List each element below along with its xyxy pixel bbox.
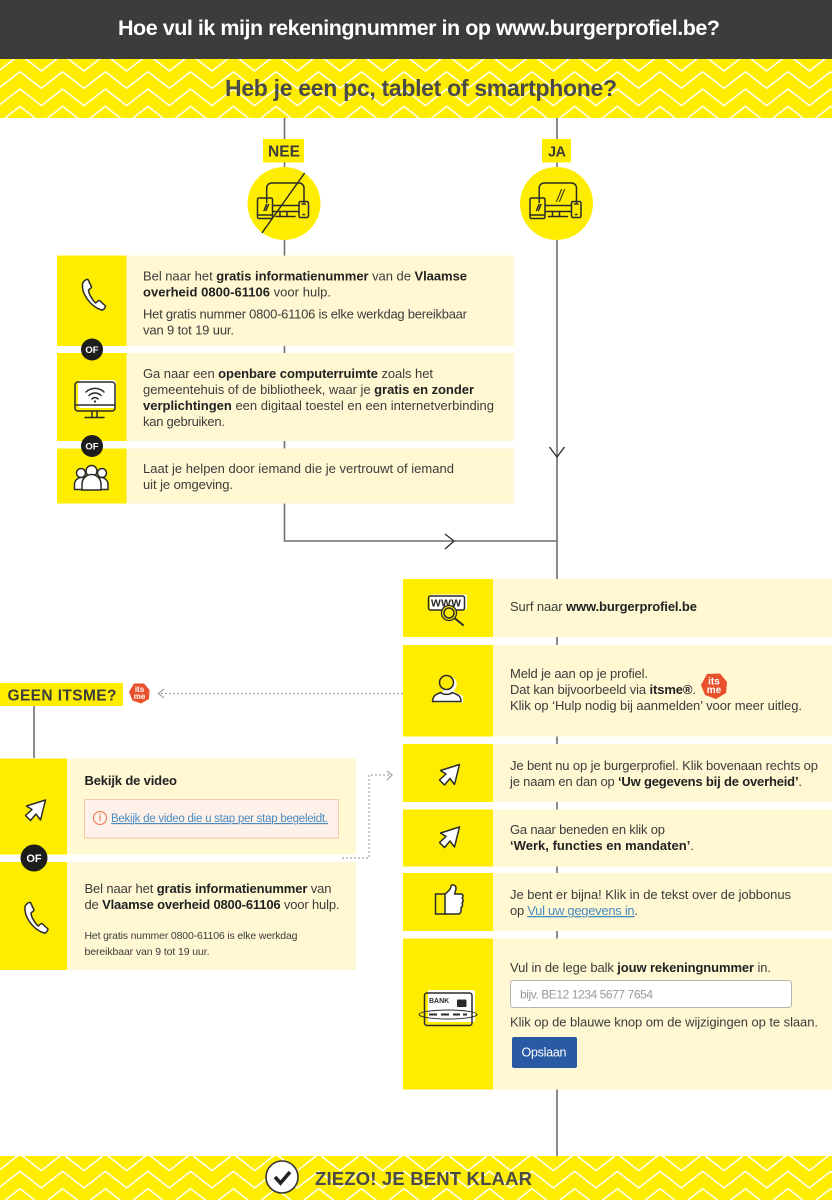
panel: public computer room: kan gebruiken. [143, 414, 225, 429]
panel: call the information number: van 9 tot 19 uur. [143, 322, 234, 338]
panel: ask someone you trust: uit je omgeving. [143, 477, 233, 492]
label: NEE [263, 139, 304, 162]
question band [0, 59, 832, 118]
badge: OF [81, 338, 103, 360]
icon: www search [428, 594, 467, 625]
label: JA: JA [548, 144, 567, 160]
input field [510, 980, 792, 1008]
icon: devices [520, 167, 593, 240]
panel: log in [403, 645, 832, 736]
logo: itsme [701, 674, 727, 699]
panel: your name and government data [403, 744, 832, 802]
panel: enter account number: Vul in de lege balk jouw rekeningnummer in. [510, 960, 771, 975]
badge: OF: OF [85, 345, 99, 356]
label: JA [542, 139, 571, 162]
arrow: JA line downward [550, 447, 564, 457]
panel: public computer room: verplichtingen een digitaal toestel en een internetverbinding [143, 398, 494, 413]
panel: public computer room: gemeentehuis of de bibliotheek, waar je gratis en zonder [143, 382, 474, 397]
panel: almost done: op Vul uw gegevens in. [510, 903, 638, 918]
arrow: NEE line joins to the right [445, 534, 454, 549]
icon: person [432, 676, 463, 702]
icon: cursor [26, 800, 46, 820]
icon: bank card [419, 990, 477, 1026]
label: NEE: NEE [268, 144, 300, 160]
icon: check mark [266, 1161, 298, 1193]
panel: call the information number: de Vlaamse overheid 0800-61106 voor hulp. [84, 897, 340, 912]
icon: telephone [82, 279, 106, 310]
icon: bank card: BANK [429, 998, 449, 1005]
panel: call the information number [0, 862, 356, 970]
badge: OF [81, 435, 103, 457]
logo: itsme: me [707, 685, 722, 696]
alert box: Bekijk de video die u stap per stap begeleidt. [111, 813, 328, 825]
question band: Heb je een pc, tablet of smartphone? [225, 75, 617, 101]
panel: call the information number: Het gratis nummer 0800-61106 is elke werkdag [84, 930, 298, 942]
panel: call the information number: Het gratis nummer 0800-61106 is elke werkdag bereikbaar [143, 306, 468, 322]
panel: call the information number: overheid 0800-61106 voor hulp. [143, 284, 331, 300]
dotted arrow to GEEN ITSME [158, 689, 403, 698]
tag: GEEN ITSME? [0, 683, 123, 706]
icon: cursor [440, 827, 460, 848]
panel: ask someone you trust [57, 448, 514, 504]
panel: almost done: Je bent er bijna! Klik in de tekst over de jobbonus [510, 887, 792, 902]
panel: surf to website [403, 579, 832, 637]
icon: cursor [440, 764, 460, 785]
dotted arrow back to main flow [342, 771, 392, 858]
panel: public computer room [57, 353, 514, 441]
icon: thumbs up [436, 885, 463, 914]
tag: GEEN ITSME?: GEEN ITSME? [8, 688, 116, 704]
badge: OF [20, 844, 48, 872]
panel: call the information number: bereikbaar van 9 tot 19 uur. [84, 946, 210, 958]
logo: itsme [129, 684, 150, 704]
panel: enter account number: Klik op de blauwe knop om de wijzigingen op te slaan. [510, 1014, 818, 1030]
flow line: JA branch [556, 118, 558, 1157]
icon: devices crossed out [248, 167, 320, 240]
panel: almost done [403, 873, 832, 931]
panel: work, functions and mandates: ‘Werk, functies en mandaten’. [510, 838, 694, 853]
panel: enter account number [403, 938, 832, 1090]
panel: your name and government data: je naam en dan op ‘Uw gegevens bij de overheid’. [509, 774, 802, 789]
button: Opslaan: Opslaan [522, 1046, 567, 1060]
panel: watch the video: Bekijk de video [84, 773, 177, 788]
input field: bijv. BE12 1234 5677 7654 [520, 988, 653, 1002]
icon: computer with wifi [75, 380, 116, 418]
panel: call the information number: Bel naar het gratis informatienummer van [84, 881, 332, 896]
panel: log in: Meld je aan op je profiel. [510, 666, 648, 681]
logo: itsme: me [134, 692, 146, 701]
logo: itsme: its [135, 685, 145, 694]
badge: OF: OF [85, 442, 99, 452]
badge: OF: OF [26, 853, 42, 865]
flow line: NEE branch [284, 118, 557, 541]
button: Opslaan [512, 1037, 577, 1068]
logo: itsme: its [708, 676, 720, 688]
title bar: Hoe vul ik mijn rekeningnummer in op www.burgerprofiel.be? [118, 16, 720, 40]
panel: surf to website: Surf naar www.burgerprofiel.be [510, 599, 697, 614]
title bar [0, 0, 832, 59]
panel: ask someone you trust: Laat je helpen door iemand die je vertrouwt of iemand [143, 461, 454, 476]
panel: log in: Dat kan bijvoorbeeld via itsme®. [510, 682, 696, 697]
icon: telephone [25, 902, 48, 933]
panel: log in: Klik op ‘Hulp nodig bij aanmelden’ voor meer uitleg. [510, 698, 802, 713]
panel: watch the video [0, 758, 356, 854]
alert box [84, 800, 338, 838]
panel: work, functions and mandates: Ga naar beneden en klik op [510, 822, 665, 837]
flow line: GEEN ITSME [33, 706, 35, 758]
panel: work, functions and mandates [403, 810, 832, 866]
panel: call the information number: Bel naar het gratis informatienummer van de Vlaamse [143, 268, 467, 284]
finish band [0, 1156, 832, 1200]
icon: www search: www [430, 596, 461, 610]
panel: your name and government data: Je bent nu op je burgerprofiel. Klik bovenaan rechts op [510, 758, 818, 773]
finish band: ZIEZO! JE BENT KLAAR [315, 1168, 532, 1189]
panel: call the information number [57, 256, 514, 346]
panel: public computer room: Ga naar een openbare computerruimte zoals het [143, 366, 433, 381]
icon: group of people [74, 466, 108, 490]
